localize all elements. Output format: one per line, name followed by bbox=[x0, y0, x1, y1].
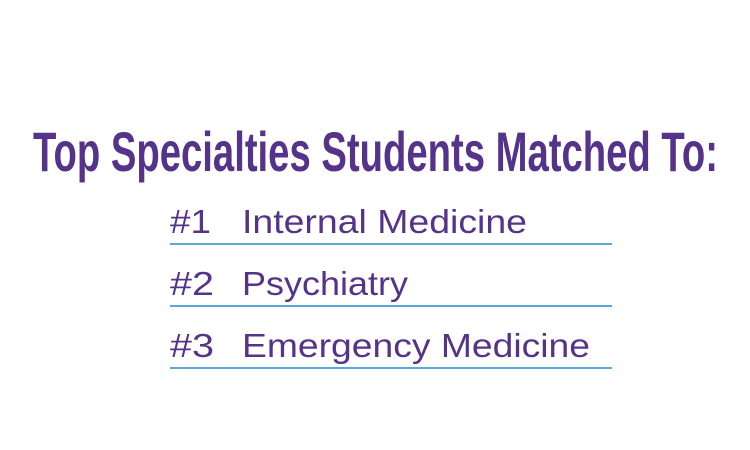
item 2: #2 bbox=[170, 265, 214, 302]
item 3: Emergency Medicine bbox=[242, 327, 590, 364]
item 1: #1 bbox=[170, 203, 211, 240]
item 3 bbox=[170, 327, 612, 369]
item 3: #3 bbox=[170, 327, 214, 364]
item 1 bbox=[170, 203, 612, 245]
item 1: Internal Medicine bbox=[242, 203, 527, 240]
item 2: Psychiatry bbox=[242, 265, 409, 302]
item 2 bbox=[170, 265, 612, 307]
